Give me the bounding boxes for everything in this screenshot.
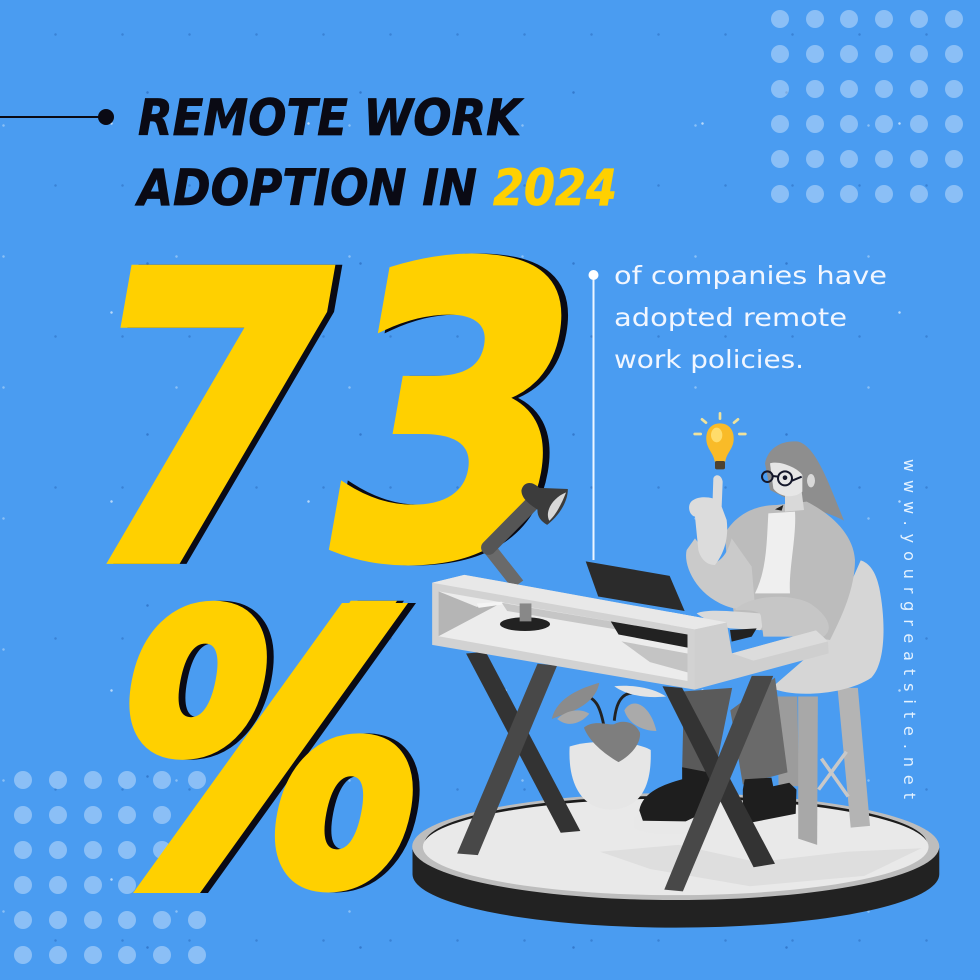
dot pattern: top right: [771, 10, 963, 203]
lamp: [489, 483, 568, 584]
laptop screen: [586, 561, 685, 611]
title: [134, 89, 617, 217]
title: 2024: [493, 159, 617, 217]
illustration: woman and light bulb: [670, 412, 855, 690]
title: REMOTE WORK: [138, 89, 524, 147]
trousers: [682, 678, 788, 784]
callout text: work policies.: [614, 345, 804, 374]
woman shirt: [755, 512, 795, 593]
illustration: desk, stool, plant and platform: [412, 483, 940, 928]
desk legs: [457, 652, 775, 891]
callout text: [614, 261, 887, 374]
callout text: adopted remote: [614, 303, 847, 332]
website url: www.yourgreatsite.net: [900, 459, 919, 799]
woman lower arm and typing hand: [697, 597, 829, 642]
desk front block and wing: [670, 612, 829, 690]
woman coat: [725, 502, 855, 640]
stool: [771, 560, 884, 845]
title: ADOPTION IN: [134, 159, 477, 217]
woman hair: [765, 441, 844, 521]
digit 3: 3: [292, 184, 615, 649]
digit 7: 7: [49, 190, 381, 655]
percent sign: %: [78, 539, 475, 968]
digit 3: 3: [299, 184, 622, 649]
woman raised sleeve: [686, 538, 755, 609]
desk: [432, 575, 727, 690]
icon: light bulb: [695, 413, 745, 469]
digit 7: 7: [42, 190, 374, 655]
callout line with dot: [588, 270, 598, 560]
woman raised hand: [689, 475, 727, 565]
platform: [412, 793, 939, 928]
callout text: of companies have: [614, 261, 887, 290]
dot pattern: bottom left: [14, 771, 206, 964]
shoes: [634, 767, 796, 834]
woman glasses: [762, 471, 802, 485]
percent sign: %: [71, 539, 468, 968]
title pointer line and dot: [0, 109, 114, 125]
plant: [552, 683, 666, 810]
woman face and neck: [770, 463, 815, 512]
big statistic: 73%: [42, 184, 622, 968]
